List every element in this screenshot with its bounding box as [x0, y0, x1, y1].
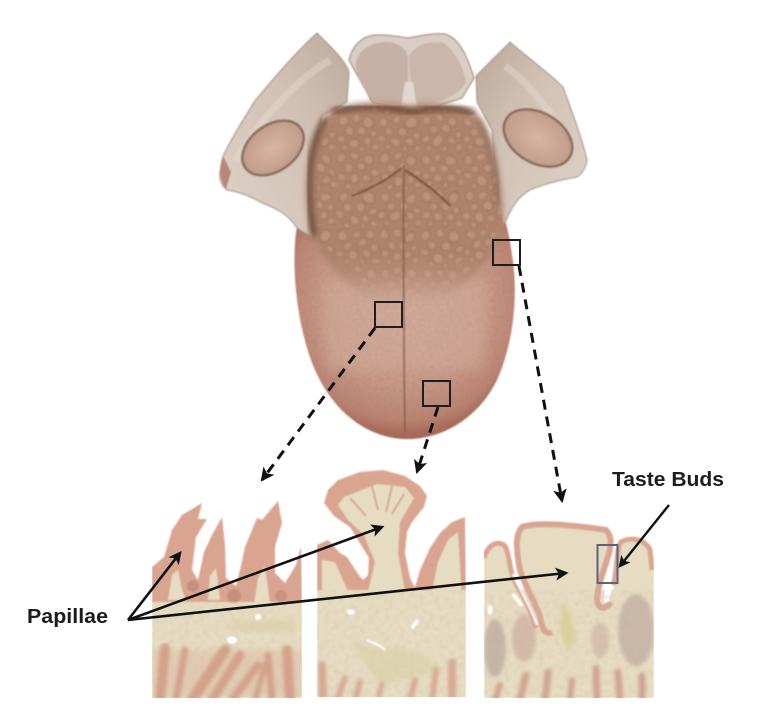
arrow: Papillae to fungiform	[128, 527, 382, 620]
label: Taste Buds: Taste Buds	[612, 469, 724, 491]
zoom box: side of tongue	[493, 240, 520, 265]
median sulcus	[404, 165, 405, 432]
left wing: palatine fold	[220, 33, 349, 238]
zoom box: tip of tongue	[423, 381, 450, 406]
epiglottis	[349, 34, 474, 112]
arrow: Papillae to foliate	[128, 573, 566, 620]
zoom box: center of tongue	[375, 302, 402, 327]
arrow: Papillae to filiform	[128, 553, 180, 620]
left tonsil	[232, 109, 314, 187]
panel: foliate papillae section	[484, 524, 654, 700]
tongue body: front	[294, 215, 516, 440]
arrow: Taste Buds label to box	[620, 505, 669, 566]
tongue body: back with papillae	[306, 102, 503, 310]
label: Papillae: Papillae	[27, 606, 108, 628]
dashed arrow: tip box to fungiform panel	[417, 407, 438, 472]
panel: filiform papillae section	[152, 501, 302, 700]
right wing: palatine fold	[476, 42, 587, 226]
tongue illustration	[220, 33, 587, 450]
dashed arrow: side box to foliate panel	[519, 266, 562, 501]
right tonsil	[493, 98, 583, 178]
dashed arrow: center box to filiform panel	[262, 328, 375, 480]
taste bud highlight box	[598, 545, 618, 583]
panel: fungiform papilla section	[317, 470, 466, 700]
